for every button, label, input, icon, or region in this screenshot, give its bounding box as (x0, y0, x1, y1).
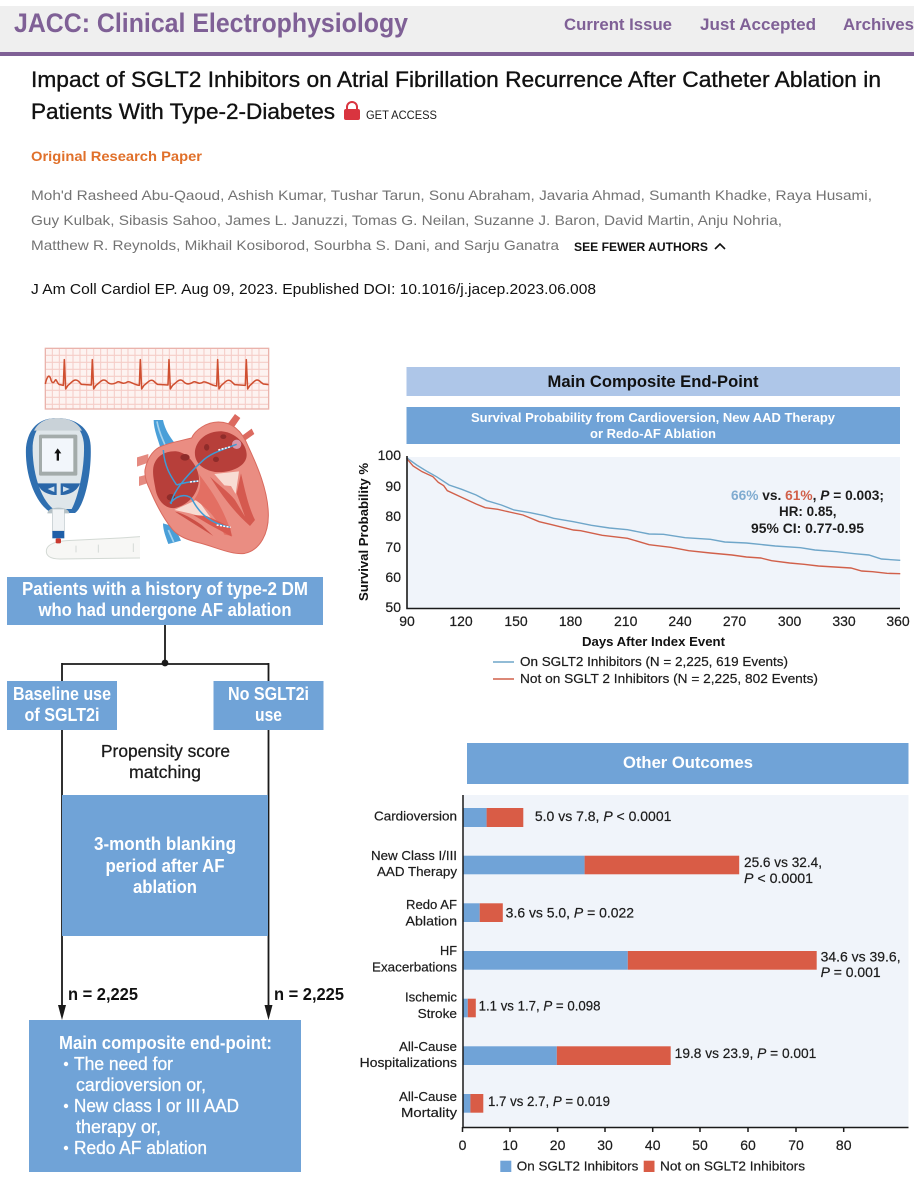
flow box: blanking period: 3-month blanking (94, 834, 236, 854)
x axis title: Days After Index Event (582, 635, 726, 649)
bar: redo AF ablation: 3.6 vs 5.0, P = 0.022 (506, 906, 634, 921)
flow box: main composite end-point: Redo AF ablation (74, 1138, 207, 1158)
bar chart: other outcomes (360, 795, 908, 1153)
icon: lock with get access label (344, 102, 437, 122)
bar: all-cause mortality: 1.7 vs 2.7, P = 0.019 (488, 1094, 610, 1109)
line chart legend: On SGLT2 Inhibitors (N = 2,225, 619 Events) (520, 654, 788, 669)
subheading: survival probability (406, 407, 900, 444)
flow box: main composite end-point (29, 1020, 301, 1172)
author list: SEE FEWER AUTHORS (574, 240, 708, 254)
n labels: n = 2,225 (68, 984, 138, 1004)
line chart legend: Not on SGLT 2 Inhibitors (N = 2,225, 802 Events) (520, 671, 818, 686)
curve: on SGLT2 inhibitors (407, 458, 900, 560)
y axis labels: 50 (385, 599, 401, 615)
subheading: survival probability: or Redo-AF Ablation (590, 426, 716, 441)
n labels (68, 984, 344, 1004)
bar: cardioversion: 5.0 vs 7.8, P < 0.0001 (535, 809, 671, 824)
author list: Matthew R. Reynolds, Mikhail Kosiborod, Sourbha S. Dani, and Sarju Ganatra (31, 237, 559, 253)
article type label: Original Research Paper (31, 148, 203, 164)
propensity score matching label: matching (129, 762, 201, 782)
bar: HF exacerbations: 34.6 vs 39.6, (821, 950, 901, 965)
author list: Moh'd Rasheed Abu-Qaoud, Ashish Kumar, Tushar Tarun, Sonu Abraham, Javaria Ahmad, Sumanth Khadke, Raya Husami, (31, 187, 872, 203)
article title (31, 67, 881, 124)
x axis labels: 10 (502, 1137, 518, 1153)
journal header bar: Just Accepted (700, 15, 816, 34)
flow box: blanking period (62, 795, 268, 936)
flow connectors and arrows (58, 625, 272, 1020)
statistics annotation: 95% CI: 0.77-0.95 (751, 521, 865, 536)
x axis labels (459, 1137, 852, 1153)
x axis labels: 150 (504, 613, 528, 629)
y axis labels: 60 (385, 569, 401, 585)
n labels: n = 2,225 (274, 984, 344, 1004)
flow box: main composite end-point: The need for (74, 1054, 173, 1074)
x axis labels: 40 (645, 1137, 661, 1153)
x axis labels: 270 (723, 613, 746, 629)
flow box: main composite end-point: cardioversion or, (76, 1075, 206, 1095)
x axis labels: 50 (692, 1137, 708, 1153)
bar: HF exacerbations: Exacerbations (372, 960, 458, 975)
icon: heart with catheters (137, 414, 268, 554)
bar: redo AF ablation (406, 897, 634, 929)
bar: cardioversion: Cardioversion (374, 809, 457, 824)
bar: all-cause hospitalizations: All-Cause (399, 1039, 457, 1054)
author list (31, 187, 872, 254)
x axis labels: 70 (788, 1137, 804, 1153)
flow box: no SGLT2i use: use (255, 705, 282, 725)
heading: main composite end-point: Main Composite End-Point (548, 372, 759, 391)
bar: HF exacerbations: P = 0.001 (821, 965, 881, 980)
heading: other outcomes: Other Outcomes (623, 753, 753, 772)
journal header bar: JACC: Clinical Electrophysiology (14, 8, 408, 38)
x axis labels (399, 613, 910, 629)
line chart legend (493, 654, 818, 686)
article title: Impact of SGLT2 Inhibitors on Atrial Fibrillation Recurrence After Catheter Ablation in (31, 67, 881, 92)
flow box: blanking period: ablation (133, 877, 197, 897)
bar chart legend: On SGLT2 Inhibitors (517, 1159, 639, 1174)
flow box: baseline SGLT2i use: of SGLT2i (24, 705, 100, 725)
x axis labels: 80 (836, 1137, 852, 1153)
x axis labels: 360 (886, 613, 910, 629)
bar: ischemic stroke: Ischemic (405, 990, 457, 1005)
flow box: no SGLT2i use: No SGLT2i (228, 684, 309, 704)
line chart: survival probability (356, 447, 910, 649)
statistics annotation: 66% vs. 61%, P = 0.003; (731, 488, 884, 503)
x axis labels: 120 (449, 613, 473, 629)
x axis labels: 30 (597, 1137, 613, 1153)
x axis labels: 210 (614, 613, 638, 629)
bar: HF exacerbations (372, 943, 901, 980)
propensity score matching label: Propensity score (101, 741, 230, 761)
bar: new class I/III AAD therapy: AAD Therapy (377, 864, 458, 879)
x axis labels: 60 (740, 1137, 756, 1153)
bar: new class I/III AAD therapy (371, 848, 822, 886)
journal header bar: Archives (843, 15, 914, 34)
bar chart legend (500, 1159, 806, 1174)
flow box: baseline SGLT2i use (7, 681, 117, 730)
bar chart legend: Not on SGLT2 Inhibitors (660, 1159, 806, 1174)
x axis labels: 240 (668, 613, 692, 629)
bar: all-cause hospitalizations (360, 1039, 816, 1070)
propensity score matching label (101, 741, 230, 782)
bar: new class I/III AAD therapy: 25.6 vs 32.4, (744, 855, 822, 870)
bar: all-cause mortality: Mortality (401, 1105, 458, 1120)
bar: ischemic stroke: Stroke (418, 1006, 457, 1021)
journal header bar (0, 6, 914, 56)
flow box: patient population: Patients with a history of type-2 DM (22, 579, 308, 599)
flow box: main composite end-point: Main composite end-point: (59, 1033, 272, 1053)
subheading: survival probability: Survival Probability from Cardioversion, New AAD Therapy (471, 410, 836, 425)
flow box: blanking period: period after AF (106, 856, 224, 876)
y axis labels: 80 (385, 508, 401, 524)
y axis labels: 90 (385, 478, 401, 494)
bar: redo AF ablation: Ablation (406, 914, 457, 929)
y axis labels (378, 447, 401, 615)
x axis labels: 90 (399, 613, 415, 629)
x axis labels: 180 (559, 613, 582, 629)
article title: Patients With Type-2-Diabetes (31, 99, 335, 124)
x axis labels: 300 (778, 613, 801, 629)
bar: ischemic stroke: 1.1 vs 1.7, P = 0.098 (479, 999, 600, 1014)
x axis labels: 0 (459, 1137, 467, 1153)
flow box: main composite end-point: New class I or III AAD (74, 1096, 239, 1116)
heading: main composite end-point (406, 367, 900, 396)
x axis labels: 20 (550, 1137, 566, 1153)
statistics annotation (731, 488, 884, 536)
bar: ischemic stroke (405, 990, 600, 1021)
icon: glucose meter and finger (26, 418, 140, 559)
bar: all-cause hospitalizations: Hospitalizations (360, 1055, 458, 1070)
bar: cardioversion (374, 808, 671, 827)
bar: all-cause mortality: All-Cause (399, 1089, 457, 1104)
bar: all-cause hospitalizations: 19.8 vs 23.9, P = 0.001 (675, 1046, 816, 1061)
citation line: J Am Coll Cardiol EP. Aug 09, 2023. Epublished DOI: 10.1016/j.jacep.2023.06.008 (31, 282, 596, 298)
curve: not on SGLT2 inhibitors (407, 458, 900, 574)
bar: new class I/III AAD therapy: P < 0.0001 (744, 871, 813, 886)
heading: other outcomes (467, 743, 908, 784)
flow box: baseline SGLT2i use: Baseline use (13, 684, 111, 704)
bar: redo AF ablation: Redo AF (406, 897, 457, 912)
flow box: no SGLT2i use (214, 681, 324, 730)
x axis labels: 330 (832, 613, 856, 629)
flow box: patient population: who had undergone AF ablation (38, 600, 292, 620)
bar: HF exacerbations: HF (440, 943, 457, 958)
journal header bar: Current Issue (564, 15, 672, 34)
y axis title: Survival Probability % (356, 463, 371, 601)
icon: lock with get access label: GET ACCESS (366, 108, 437, 122)
flow box: main composite end-point: therapy or, (76, 1117, 161, 1137)
bar: new class I/III AAD therapy: New Class I/III (371, 848, 457, 863)
y axis labels: 100 (378, 447, 401, 463)
y axis labels: 70 (385, 539, 401, 555)
icon: ECG strip (45, 348, 269, 409)
bar: all-cause mortality (399, 1089, 610, 1120)
flow box: patient population (7, 577, 323, 625)
statistics annotation: HR: 0.85, (779, 504, 836, 519)
author list: Guy Kulbak, Sibasis Sahoo, James L. Januzzi, Tomas G. Neilan, Suzanne J. Baron, David Martin, Anju Nohria, (31, 212, 782, 228)
